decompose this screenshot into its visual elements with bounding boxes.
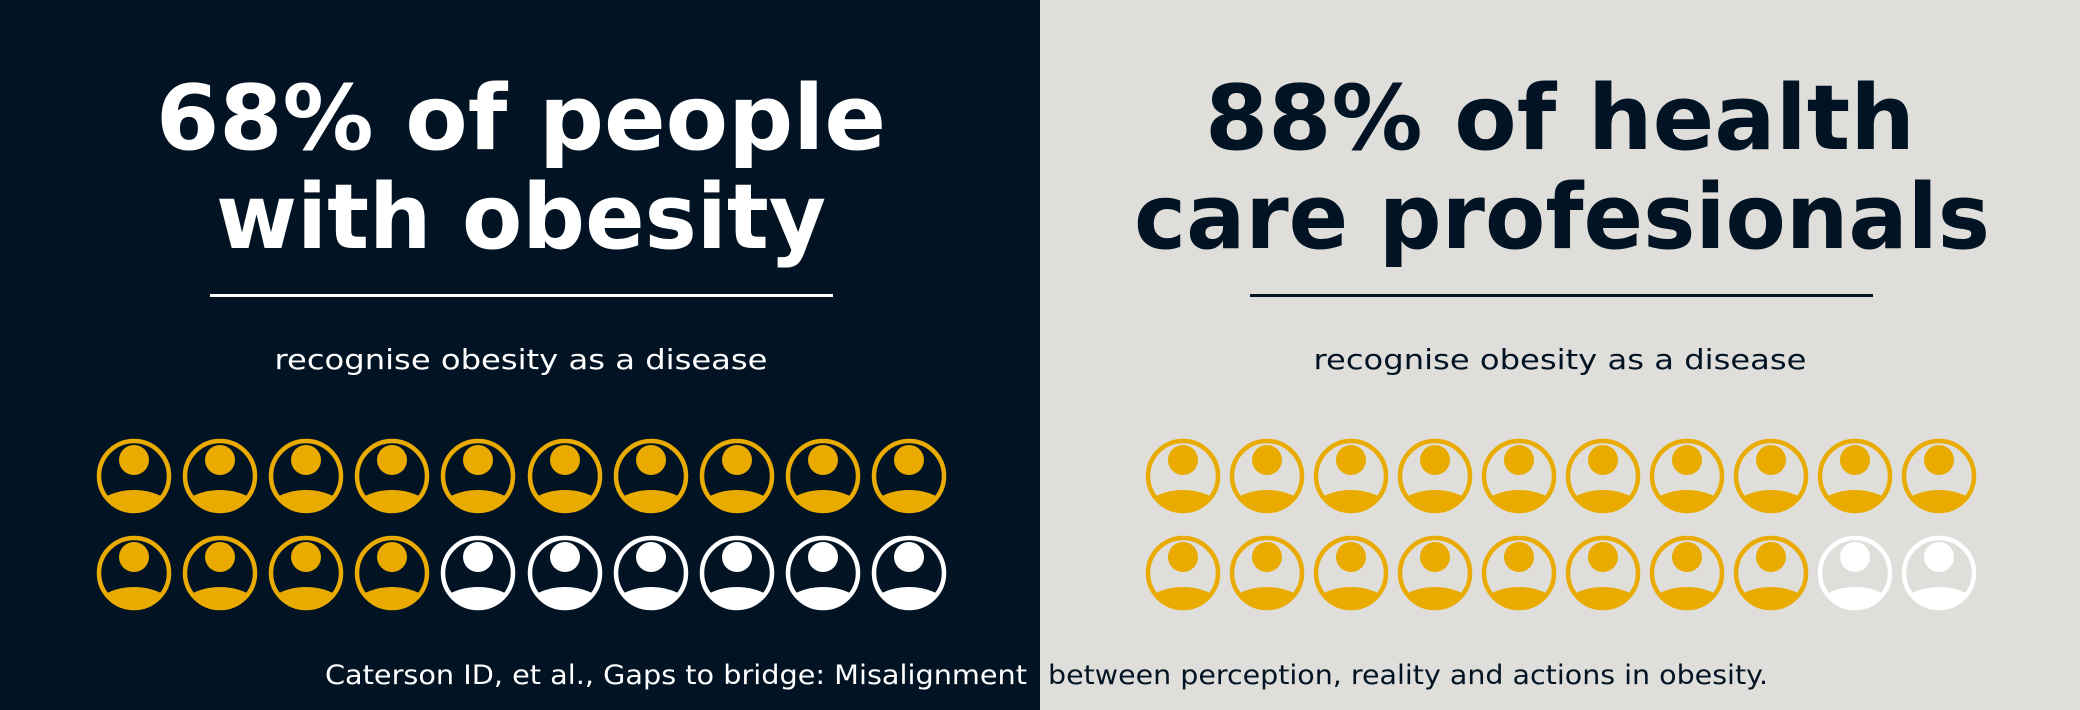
panel: health care professionals xyxy=(1040,0,2080,710)
title: 88% of health care profesionals: care profesionals xyxy=(1134,165,1990,270)
footer: citation xyxy=(325,660,1768,691)
icon grid: 68% xyxy=(92,441,951,639)
icon grid: 88% xyxy=(1141,441,1981,639)
panel: people with obesity xyxy=(0,0,1040,710)
subtitle: recognise obesity as a disease xyxy=(1314,343,1806,376)
subtitle: recognise obesity as a disease xyxy=(274,343,768,376)
title: 68% of people with obesity: with obesity xyxy=(216,165,826,270)
title: 68% of people with obesity xyxy=(156,66,886,270)
footer: citation: between perception, reality and actions in obesity. xyxy=(1048,660,1768,691)
title: 68% of people with obesity: 68% of people xyxy=(156,66,886,171)
title: 88% of health care profesionals: 88% of health xyxy=(1205,66,1915,171)
title: 88% of health care profesionals xyxy=(1134,66,1990,270)
footer: citation: Caterson ID, et al., Gaps to bridge: Misalignment xyxy=(325,660,1027,691)
